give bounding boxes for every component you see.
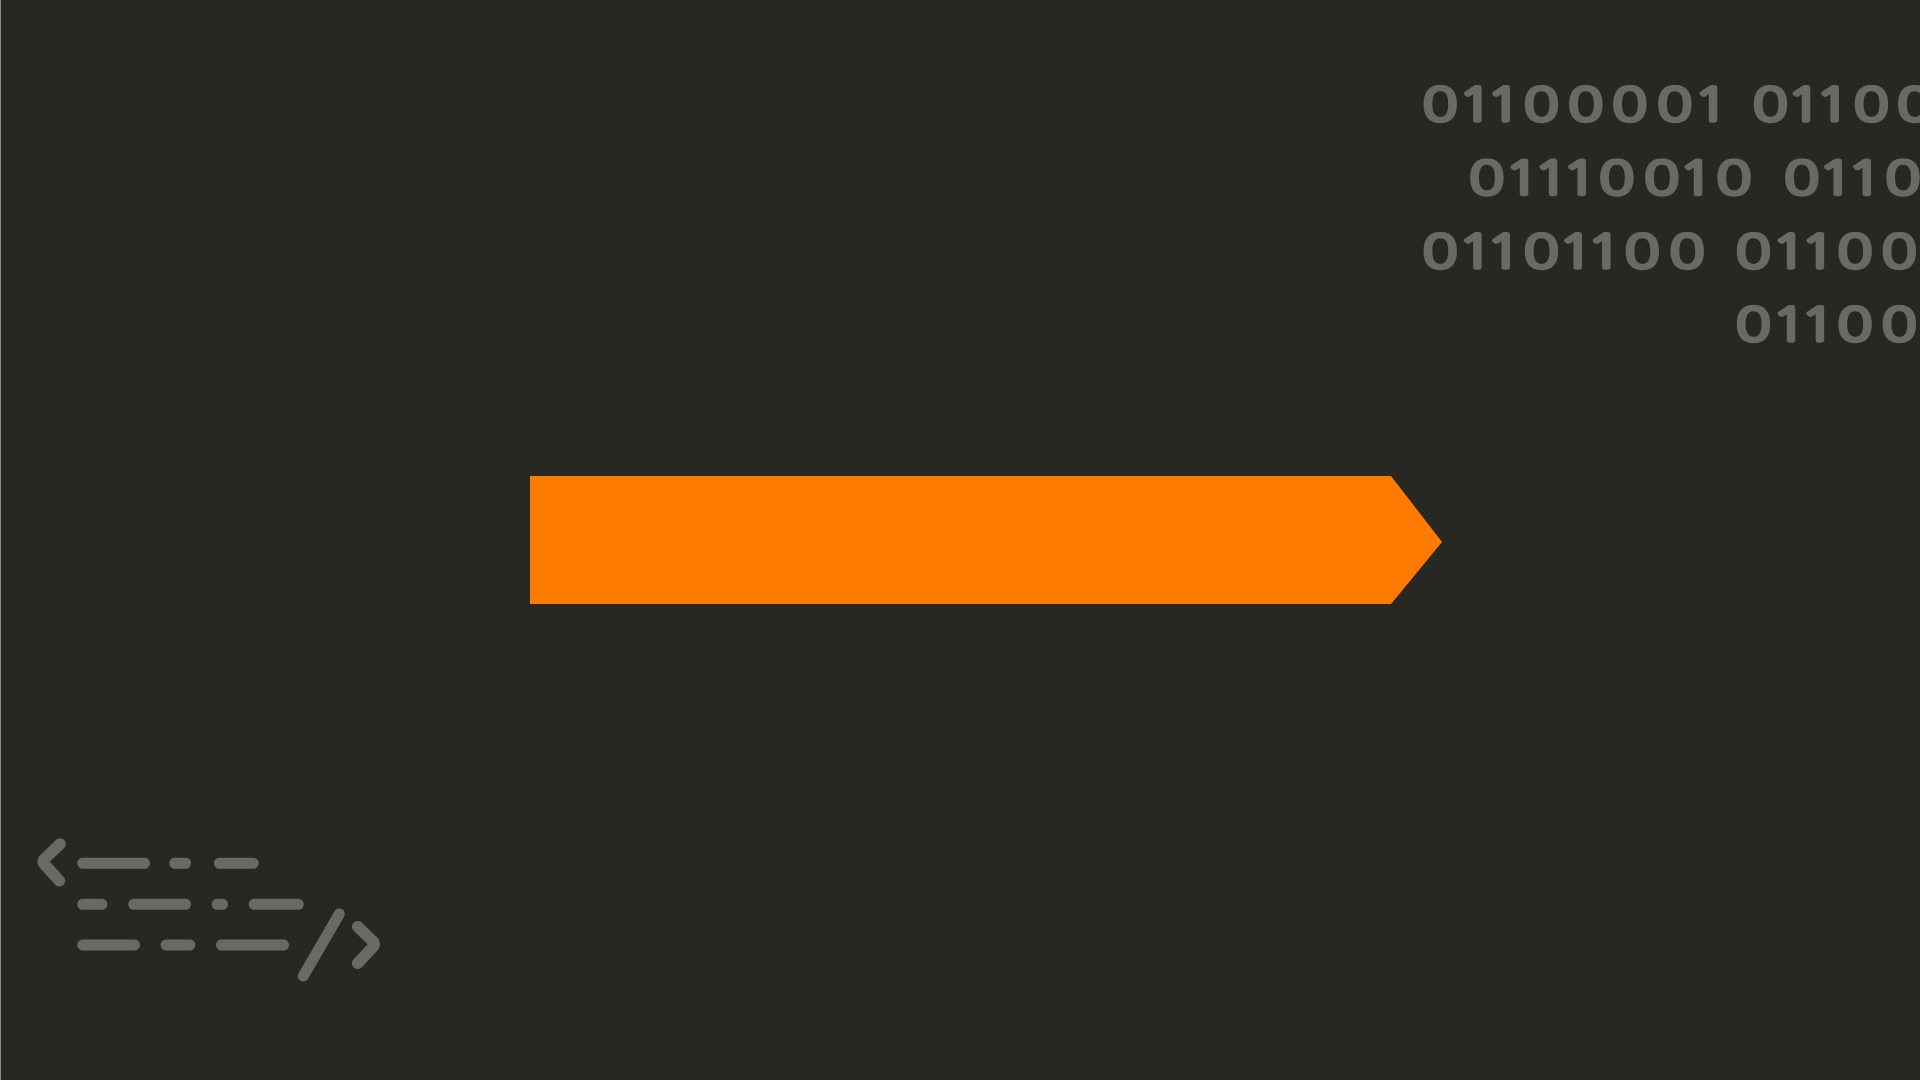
icon: code tag with dashed lines xyxy=(43,844,374,976)
binary line 3: 01101100 01100 xyxy=(1422,229,1917,275)
icon: greater-than bracket xyxy=(358,927,374,963)
icon: slash xyxy=(303,914,339,976)
code line 1 xyxy=(83,858,253,869)
code line 2 xyxy=(83,899,298,910)
binary line 1: 01100001 01100 xyxy=(1422,82,1920,128)
code line 3 xyxy=(83,940,284,950)
binary line 2: 01110010 0110 xyxy=(1469,156,1920,201)
icon: less-than bracket xyxy=(43,844,60,881)
orange arrow banner xyxy=(530,476,1442,604)
binary line 4: 01100 xyxy=(1735,302,1917,348)
binary code text block xyxy=(1422,82,1920,348)
